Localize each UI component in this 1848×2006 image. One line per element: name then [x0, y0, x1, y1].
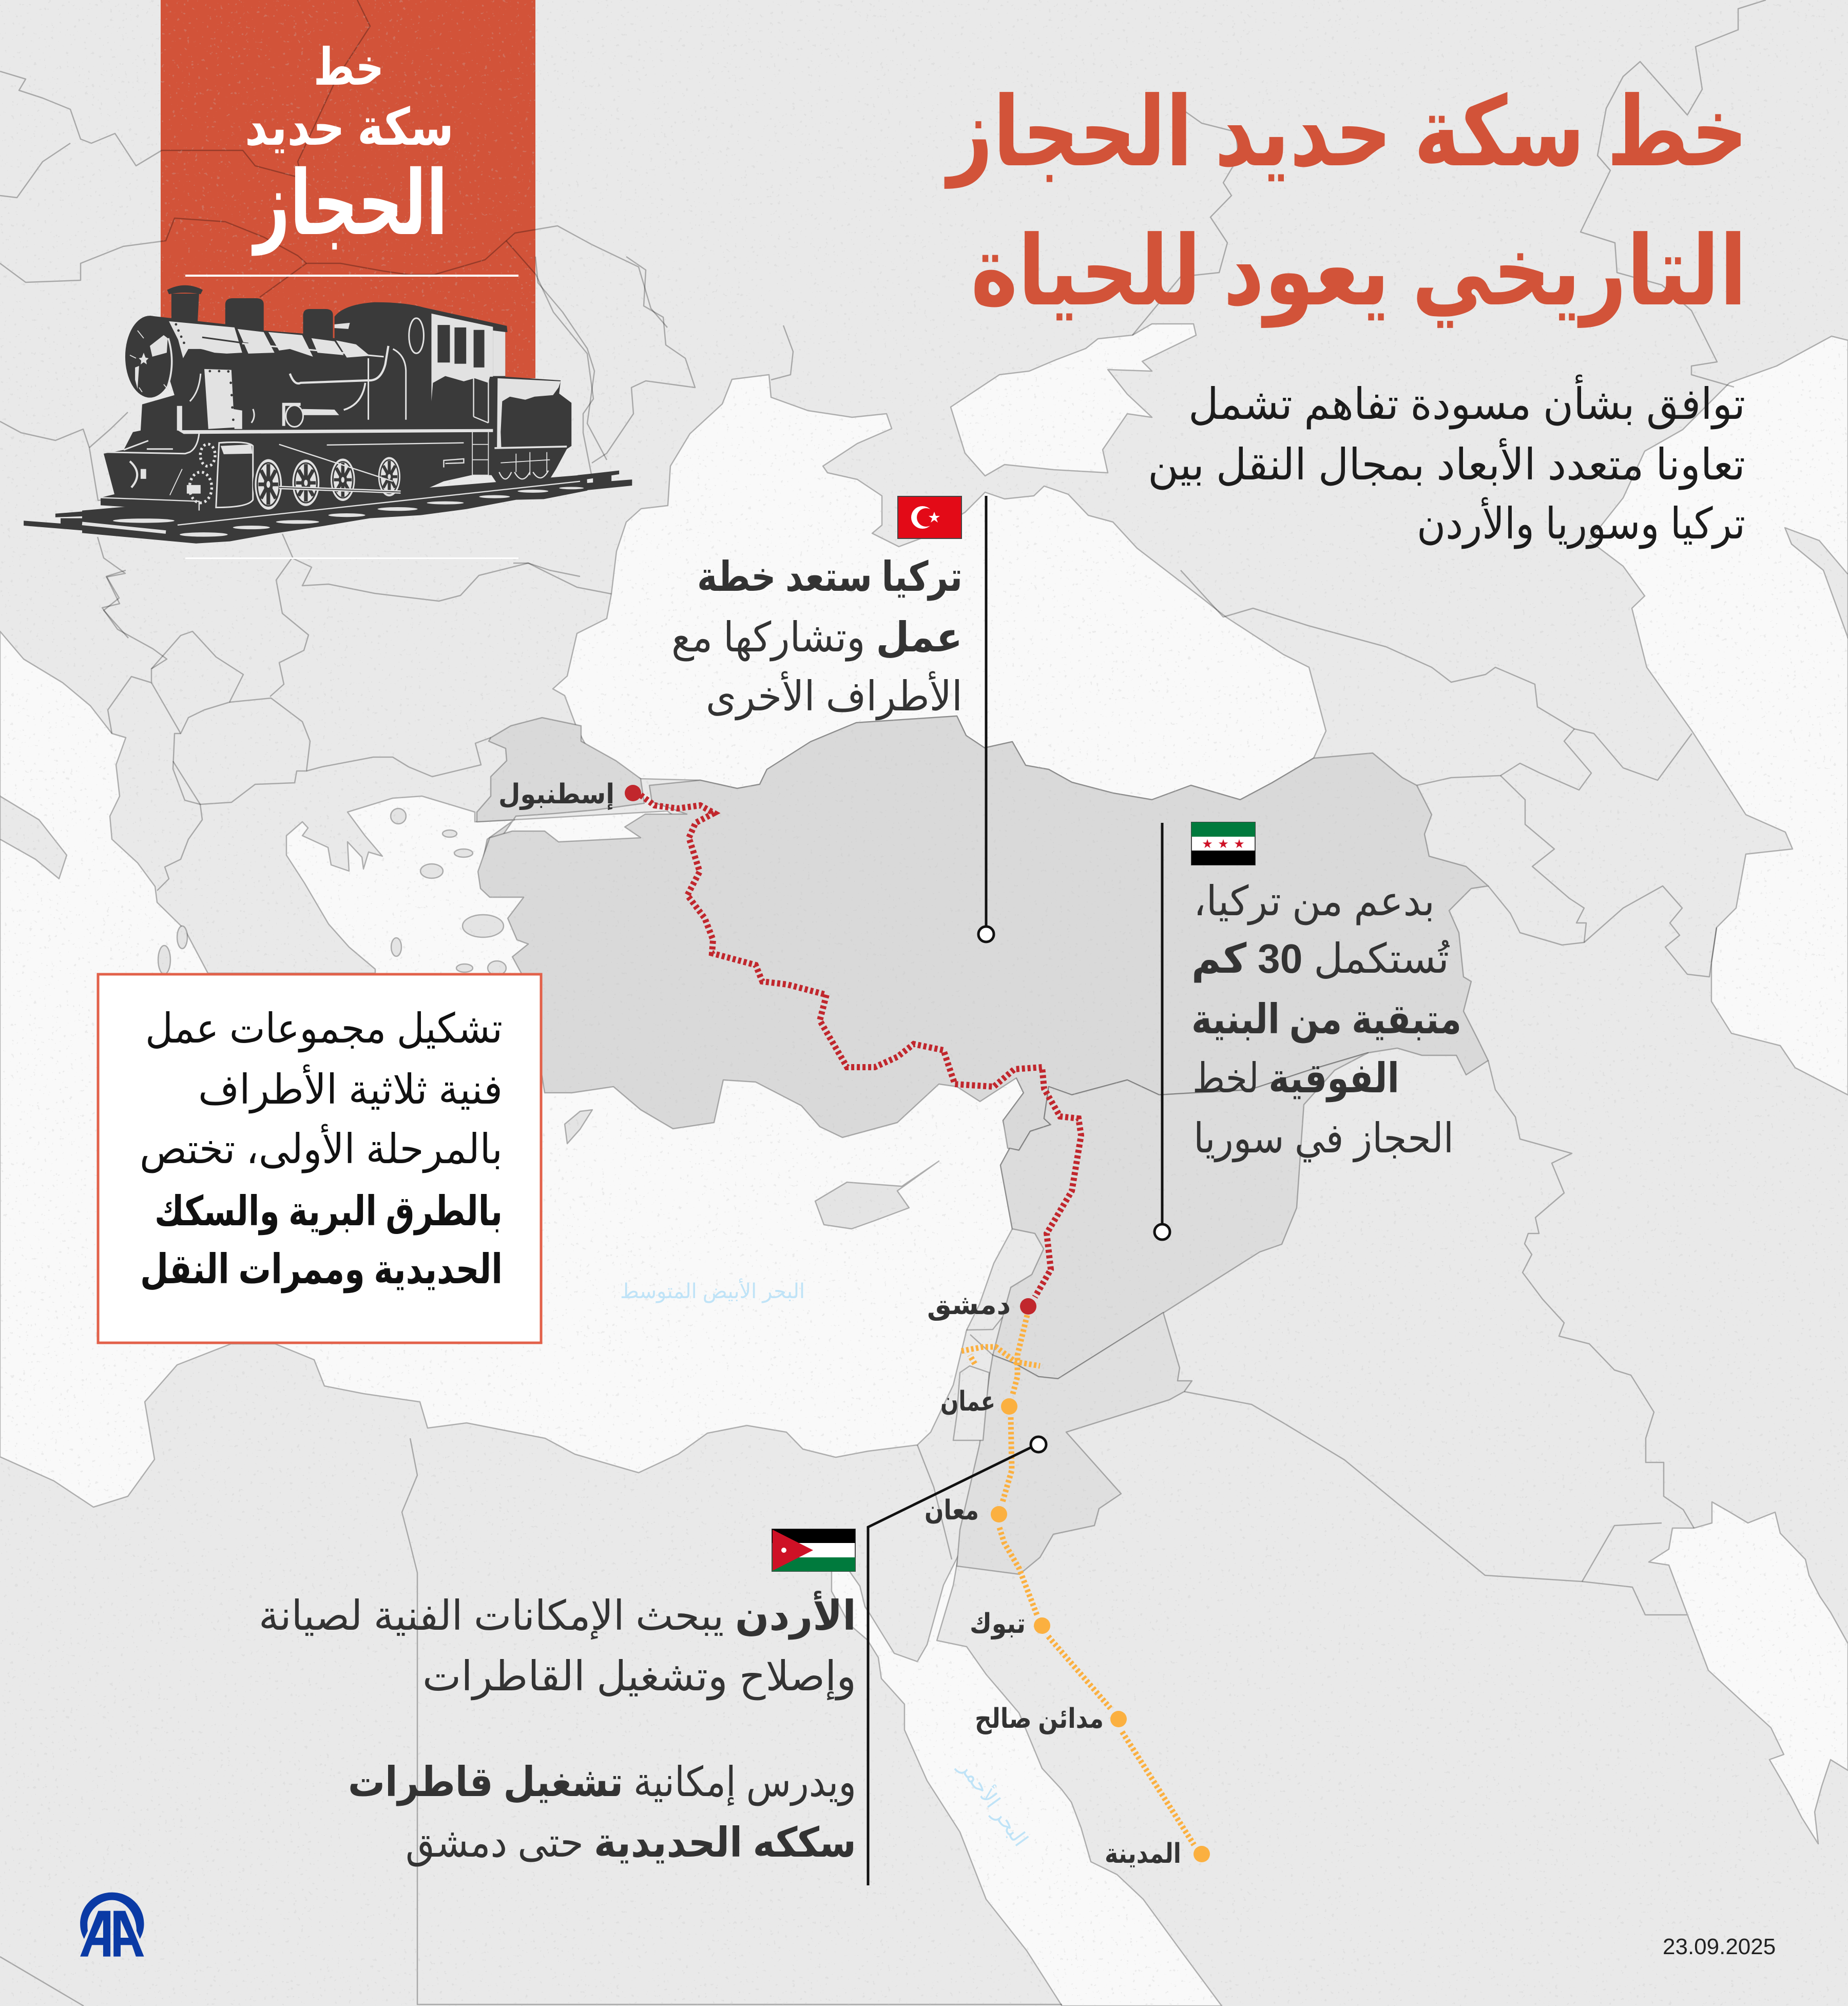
land: italy heel: [0, 796, 67, 879]
city: Maan: معان: [925, 1495, 979, 1526]
text: syria callout: بدعم من تركيا،: [1194, 878, 1435, 925]
land: jordan: [957, 1313, 1192, 1574]
text: jordan callout: [259, 1591, 856, 1867]
drive wheels: [253, 455, 402, 512]
text: jordan callout: الأردن يبحث الإمكانات الفنية لصيانة: [259, 1591, 856, 1640]
panel heading: خط: [314, 38, 384, 96]
city: Damascus: دمشق: [927, 1290, 1011, 1321]
text: jordan callout: ويدرس إمكانية تشغيل قاطرات: [348, 1759, 856, 1806]
connecting rods: [279, 445, 401, 492]
panel rule bottom: [185, 557, 518, 559]
intro text: توافق بشأن مسودة تفاهم تشمل: [1188, 374, 1745, 430]
locomotive boiler highlights: [135, 314, 561, 494]
label: mediterranean sea: البحر الأبيض المتوسط: [620, 1278, 805, 1303]
callout leader: syria: [1154, 823, 1170, 1240]
panel heading: [245, 38, 454, 256]
locomotive silhouette: [101, 285, 571, 514]
route: orange Damascus to Medina: [961, 1315, 1194, 1845]
panel heading: الحجاز: [251, 153, 448, 256]
land: caspian east peninsula: [1785, 528, 1848, 638]
text: syria callout: الفوقية لخط: [1192, 1055, 1399, 1103]
text: jordan callout: سككه الحديدية حتى دمشق: [406, 1820, 856, 1867]
land: cyprus: [815, 1161, 939, 1229]
sea: persian gulf: [1649, 1502, 1848, 1844]
text: turkey callout: عمل وتشاركها مع: [671, 614, 962, 662]
panel rule top: [185, 275, 518, 277]
icon: syria flag: [1191, 822, 1255, 865]
callout leader: jordan: [868, 1437, 1046, 1885]
icon: turkey flag: [898, 496, 961, 538]
sea: red sea: [832, 1555, 1222, 2006]
land: thrace: [477, 718, 644, 859]
icon: syria flag: ★: [1202, 837, 1213, 851]
callout box: تشكيل مجموعات عمل: [145, 1006, 503, 1053]
callout box: فنية ثلاثية الأطراف: [198, 1064, 503, 1114]
city: Istanbul: إسطنبول: [498, 779, 614, 810]
icon: steam locomotive: [24, 285, 632, 544]
intro text: [1148, 374, 1745, 549]
icon: jordan flag: [772, 1529, 855, 1571]
text: syria callout: تُستكمل 30 كم: [1191, 936, 1450, 983]
logo: AA: [80, 1893, 144, 1957]
callout box: بالطرق البرية والسكك: [155, 1188, 503, 1236]
city: Madain Saleh: مدائن صالح: [975, 1704, 1104, 1734]
intro text: تركيا وسوريا والأردن: [1417, 497, 1745, 549]
text: jordan callout: وإصلاح وتشغيل القاطرات: [422, 1653, 856, 1701]
sea: caspian: [1589, 336, 1848, 1095]
city: Medina: المدينة: [1105, 1839, 1181, 1869]
text: turkey callout: تركيا ستعد خطة: [697, 554, 962, 601]
icon: syria flag: ★: [1234, 837, 1245, 851]
city: Amman: عمان: [940, 1386, 995, 1417]
icon: syria flag: ★: [1218, 837, 1229, 851]
callout box: الحديدية وممرات النقل: [140, 1246, 503, 1294]
sea: azov: [951, 324, 1196, 476]
cab windows: [175, 323, 485, 421]
route: red Istanbul to Damascus: [641, 795, 1081, 1297]
sea: mediterranean: [0, 631, 1024, 1507]
panel: red title panel: [161, 0, 535, 378]
text: syria callout: الحجاز في سوريا: [1194, 1115, 1454, 1163]
land: aegean islands: [158, 808, 592, 1144]
city: Tabuk: تبوك: [970, 1609, 1026, 1639]
track: [24, 471, 632, 544]
callout box: بالمرحلة الأولى، تختص: [140, 1124, 503, 1173]
title: [944, 78, 1748, 328]
text: syria callout: متبقية من البنية: [1191, 996, 1461, 1044]
date: 23.09.2025: [1663, 1934, 1776, 1959]
panel heading: سكة حديد: [245, 99, 454, 156]
label: red sea: البحر الأحمر: [954, 1754, 1034, 1851]
callout leader: turkey: [978, 496, 994, 942]
land: anatolia (turkey): [478, 716, 1488, 1150]
locomotive line detail: [101, 318, 567, 511]
land: syria: [993, 1053, 1368, 1379]
text: syria callout: [1191, 878, 1461, 1163]
land: west bank: [953, 1366, 989, 1440]
sea: black sea: [553, 375, 1326, 800]
callout box: [98, 974, 541, 1343]
intro text: تعاونا متعدد الأبعاد بمجال النقل بين: [1148, 438, 1745, 490]
text: turkey callout: الأطراف الأخرى: [706, 671, 962, 721]
text: turkey callout: [671, 554, 962, 721]
